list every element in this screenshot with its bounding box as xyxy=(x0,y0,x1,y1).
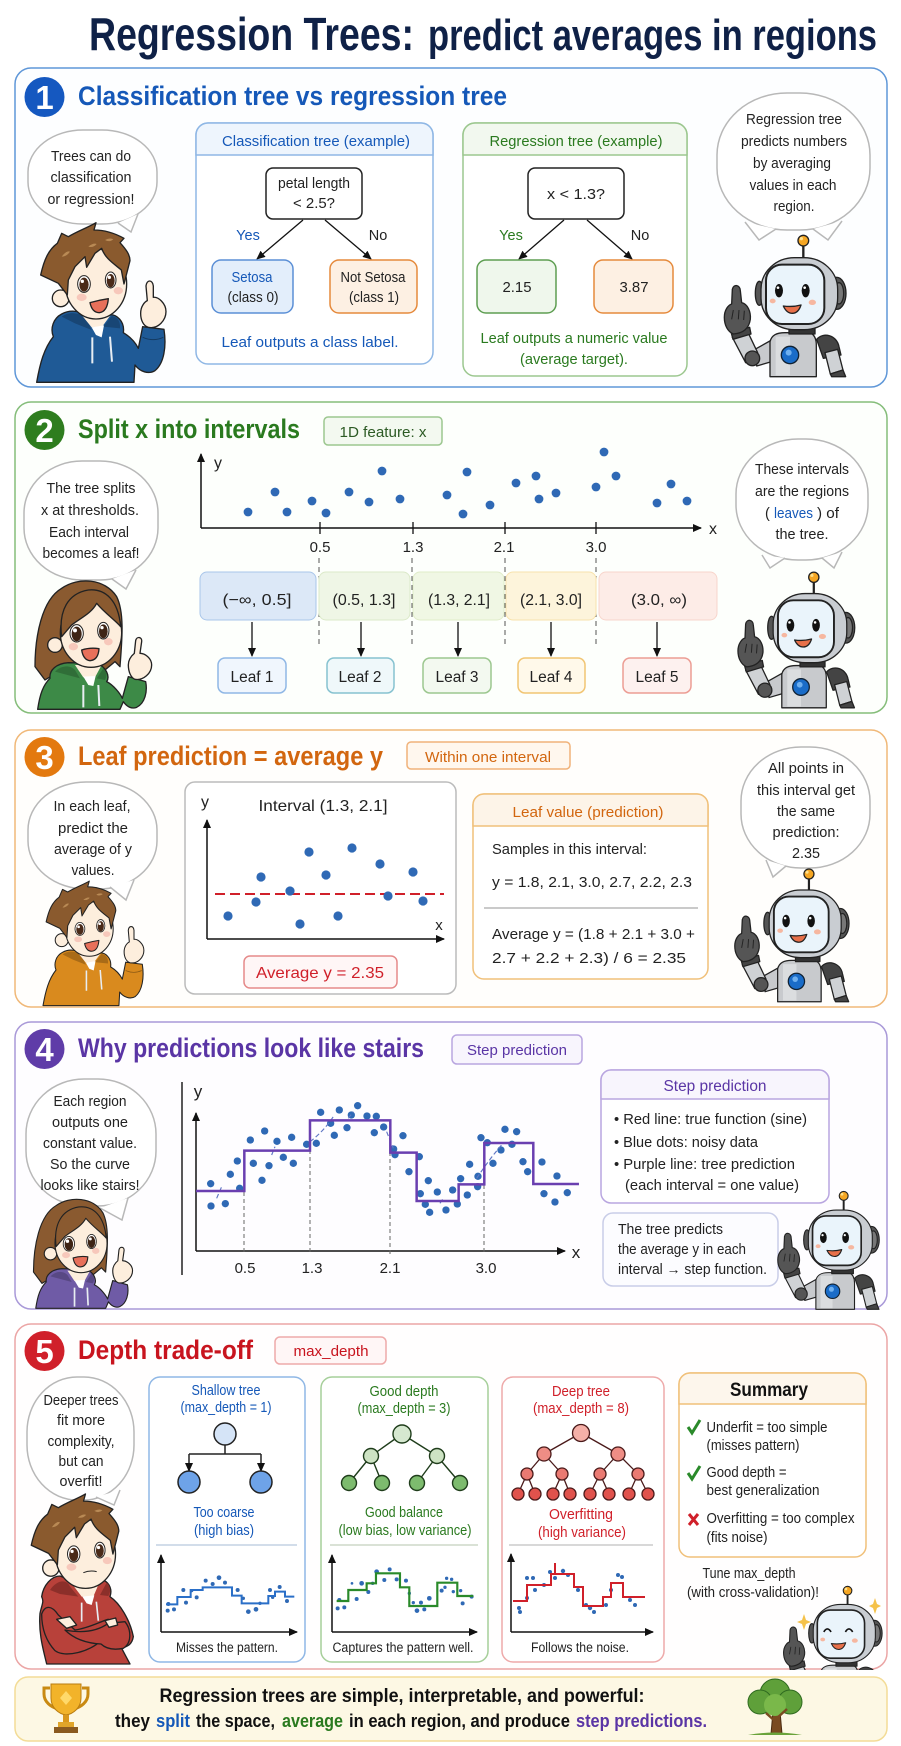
speech bubble: deeper trees: Deeper trees xyxy=(44,1393,118,1409)
heading 3: Leaf prediction = average y xyxy=(78,741,383,771)
scatter chart with thresholds: 2.1 xyxy=(494,539,514,556)
card: good depth xyxy=(321,1377,488,1662)
leaf boxes: Leaf 2 xyxy=(338,669,382,686)
scatter chart with thresholds: 1.3 xyxy=(403,539,423,556)
speech bubble: intervals are the regions: ( xyxy=(765,506,770,522)
decision node: < 2.5? xyxy=(293,196,335,212)
callout: tune max_depth: Tune max_depth xyxy=(702,1566,796,1582)
speech bubble: regression tree predicts numbers: predicts numbers xyxy=(741,134,847,150)
leaf not setosa: Not Setosa xyxy=(340,270,406,286)
character: robot xyxy=(778,1191,879,1309)
badge 5: 5 xyxy=(35,1333,54,1370)
card: shallow tree: (high bias) xyxy=(194,1523,254,1539)
panel: regression tree example: (average target). xyxy=(520,352,628,368)
chart card: interval scatter with mean: x xyxy=(435,917,443,934)
card: deep tree: (max_depth = 8) xyxy=(533,1401,629,1417)
panel: leaf value prediction: 2.7 + 2.2 + 2.3) / 6 = 2.35 xyxy=(492,951,686,967)
speech bubble: deeper trees: overfit! xyxy=(60,1474,102,1490)
speech bubble: intervals are the regions: the tree. xyxy=(776,527,828,543)
callout average xyxy=(244,956,397,988)
panel: step prediction legend: • Red line: true function (sine) xyxy=(614,1112,807,1128)
leaf boxes: Leaf 3 xyxy=(436,669,478,686)
badge 1: 1 xyxy=(35,79,54,116)
panel: step prediction legend: • Blue dots: noisy data xyxy=(614,1135,759,1151)
chart card: interval scatter with mean xyxy=(185,782,456,994)
card: deep tree: Overfitting xyxy=(549,1507,613,1523)
panel: classification tree example xyxy=(196,123,433,364)
note: tree predicts average: the average y in each xyxy=(618,1242,746,1258)
conclusion second line: in each region, and produce xyxy=(349,1711,570,1731)
panel: step prediction legend: Step prediction xyxy=(664,1078,766,1095)
card: good depth: (max_depth = 3) xyxy=(358,1401,450,1417)
interval bar: (2.1, 3.0] xyxy=(520,592,582,609)
character: girl in purple hoodie xyxy=(33,1199,133,1308)
speech bubble: each leaf: average of y xyxy=(54,842,133,858)
tag step prediction xyxy=(452,1035,582,1064)
tag within one interval: Within one interval xyxy=(425,750,551,766)
panel: summary: Summary xyxy=(730,1380,808,1401)
panel: summary: best generalization xyxy=(706,1483,820,1499)
panel: section 1 classification vs regression xyxy=(15,68,887,387)
speech bubble: all points xyxy=(741,747,870,877)
panel: leaf value prediction: y = 1.8, 2.1, 3.0, 2.7, 2.2, 2.3 xyxy=(492,875,692,891)
card: shallow tree: Misses the pattern. xyxy=(176,1640,278,1655)
interval bar: (3.0, ∞) xyxy=(631,592,687,609)
speech bubble: regression tree predicts numbers: region. xyxy=(774,199,814,215)
tree diagram depth 8 xyxy=(512,1424,654,1500)
step chart: 3.0 xyxy=(476,1260,496,1277)
conclusion second line xyxy=(115,1711,707,1731)
leaf 2.15: 2.15 xyxy=(502,280,532,296)
card: deep tree: Deep tree xyxy=(552,1384,610,1400)
speech bubble: each region: constant value. xyxy=(43,1136,137,1152)
step chart: 1.3 xyxy=(302,1260,322,1277)
panel: classification tree example: Classification tree (example) xyxy=(222,134,410,150)
decision node xyxy=(266,168,362,219)
note: tree predicts average xyxy=(603,1213,778,1286)
step chart: 2.1 xyxy=(380,1260,400,1277)
scatter chart with thresholds xyxy=(201,448,717,645)
interval bar: (−∞, 0.5] xyxy=(222,592,292,609)
speech bubble: each region: outputs one xyxy=(52,1115,128,1131)
conclusion second line: split xyxy=(156,1711,190,1731)
arrows yes no regression: No xyxy=(631,228,649,244)
leaf 2.15 xyxy=(477,260,556,313)
conclusion second line: the space, xyxy=(196,1711,275,1731)
decision node x xyxy=(528,168,624,219)
speech bubble: intervals are the regions: ) of xyxy=(817,506,840,522)
badge 3: 3 xyxy=(35,739,54,776)
note: tree predicts average: interval → step function. xyxy=(618,1262,767,1278)
tag 1D feature xyxy=(324,417,442,445)
character: robot xyxy=(735,869,849,1002)
banner: conclusion: Regression trees are simple, interpretable, and powerful: xyxy=(160,1686,644,1707)
panel: summary: (misses pattern) xyxy=(706,1438,800,1454)
speech bubble: tree splits: x at thresholds. xyxy=(41,503,139,519)
tag max_depth: max_depth xyxy=(294,1344,368,1360)
card: deep tree: Follows the noise. xyxy=(531,1640,629,1655)
scatter chart with thresholds: 3.0 xyxy=(586,539,606,556)
speech bubble: trees can do xyxy=(28,130,157,232)
decision node x: x < 1.3? xyxy=(547,187,605,203)
note: tree predicts average: The tree predicts xyxy=(618,1222,723,1238)
panel: regression tree example: Regression tree (example) xyxy=(490,134,662,150)
speech bubble: intervals are the regions: These intervals xyxy=(755,462,849,478)
panel: leaf value prediction: Samples in this interval: xyxy=(492,842,647,858)
panel: regression tree example xyxy=(463,123,687,376)
card: shallow tree: (max_depth = 1) xyxy=(180,1400,272,1416)
speech bubble: tree splits: becomes a leaf! xyxy=(42,546,140,562)
tag within one interval xyxy=(407,742,570,769)
speech bubble: deeper trees xyxy=(27,1377,134,1505)
arrows yes no: Yes xyxy=(236,228,260,244)
speech bubble: all points: the same xyxy=(777,804,835,820)
heading 4: Why predictions look like stairs xyxy=(78,1033,424,1063)
step chart: y xyxy=(194,1082,203,1101)
speech bubble: trees can do: or regression! xyxy=(48,192,134,208)
speech bubble: all points: 2.35 xyxy=(792,846,820,862)
arrows yes no xyxy=(236,220,387,259)
tree diagram depth 1 xyxy=(178,1423,272,1493)
badge 2: 2 xyxy=(35,412,54,449)
interval bar: (0.5, 1.3] xyxy=(332,592,396,609)
icon: tree xyxy=(748,1679,802,1735)
speech bubble: regression tree predicts numbers: by averaging xyxy=(753,156,831,172)
speech bubble: each region: Each region xyxy=(54,1094,126,1110)
panel: section 2 split x into intervals xyxy=(15,402,887,713)
speech bubble: deeper trees: but can xyxy=(58,1454,104,1470)
mini chart good depth xyxy=(332,1555,477,1632)
conclusion second line: step predictions. xyxy=(576,1711,707,1731)
icon: trophy xyxy=(44,1684,88,1733)
speech bubble: regression tree predicts numbers xyxy=(717,93,870,240)
icon: check good depth xyxy=(688,1466,700,1479)
speech bubble: each region: So the curve xyxy=(50,1157,130,1173)
mini chart shallow xyxy=(161,1555,297,1632)
mini chart deep xyxy=(511,1554,653,1632)
leaf 3.87: 3.87 xyxy=(620,280,648,296)
callout: tune max_depth xyxy=(687,1566,819,1601)
speech bubble: deeper trees: complexity, xyxy=(48,1434,114,1450)
leaf boxes: Leaf 1 xyxy=(230,669,274,686)
character: happy robot with sparkles xyxy=(783,1586,883,1670)
arrows to leaves xyxy=(252,622,657,656)
speech bubble: intervals are the regions xyxy=(736,439,868,568)
panel: summary xyxy=(679,1373,866,1557)
step chart xyxy=(182,1082,581,1277)
badge 1 xyxy=(24,77,64,117)
leaf boxes: Leaf 5 xyxy=(636,669,678,686)
tree diagram depth 3 xyxy=(342,1425,468,1490)
leaf setosa xyxy=(212,260,293,313)
leaf setosa: Setosa xyxy=(232,270,273,286)
step chart: x xyxy=(572,1243,581,1262)
panel: step prediction legend: • Purple line: tree prediction xyxy=(614,1157,795,1173)
panel: summary: (fits noise) xyxy=(706,1530,768,1546)
panel: summary: Underfit = too simple xyxy=(706,1420,828,1436)
card: shallow tree xyxy=(149,1377,305,1662)
scatter chart with thresholds: 0.5 xyxy=(310,539,330,556)
step chart: 0.5 xyxy=(235,1260,255,1277)
speech bubble: tree splits: The tree splits xyxy=(46,481,136,497)
banner: conclusion xyxy=(15,1677,887,1741)
panel: leaf value prediction xyxy=(473,794,708,979)
speech bubble: intervals are the regions: leaves xyxy=(774,506,813,522)
speech bubble: deeper trees: fit more xyxy=(57,1413,105,1429)
icon: cross overfitting xyxy=(689,1514,698,1525)
speech bubble: each region: looks like stairs! xyxy=(40,1178,140,1194)
tag 1D feature: 1D feature: x xyxy=(340,425,427,441)
panel: regression tree example: Leaf outputs a numeric value xyxy=(480,331,668,347)
tag max_depth xyxy=(275,1337,386,1364)
panel: classification tree example: Leaf outputs a class label. xyxy=(222,335,398,351)
panel: section 3 leaf prediction xyxy=(15,730,887,1007)
card: good depth: Good balance xyxy=(365,1505,443,1521)
card: good depth: (low bias, low variance) xyxy=(338,1523,472,1539)
speech bubble: each leaf: In each leaf, xyxy=(54,799,130,815)
card: shallow tree: Shallow tree xyxy=(192,1383,260,1399)
speech bubble: each leaf: predict the xyxy=(58,821,128,837)
leaf setosa: (class 0) xyxy=(228,290,278,306)
card: good depth: Good depth xyxy=(370,1384,438,1400)
panel: step prediction legend xyxy=(601,1070,829,1203)
speech bubble: trees can do: Trees can do xyxy=(51,149,131,165)
card: good depth: Captures the pattern well. xyxy=(332,1640,474,1655)
badge 3 xyxy=(24,737,64,777)
interval bar xyxy=(200,572,717,620)
badge 5 xyxy=(24,1331,64,1371)
speech bubble: regression tree predicts numbers: Regression tree xyxy=(746,112,842,128)
speech bubble: each leaf xyxy=(28,782,157,900)
heading 2: Split x into intervals xyxy=(78,414,300,444)
conclusion second line: they xyxy=(115,1711,150,1731)
interval bar: (1.3, 2.1] xyxy=(428,592,490,609)
character: thinking boy with crossed arms xyxy=(31,1494,133,1664)
chart card: interval scatter with mean: Interval (1.3, 2.1] xyxy=(258,798,388,815)
character: boy in blue hoodie xyxy=(37,223,166,382)
title: Regression Trees: xyxy=(89,8,414,60)
panel: leaf value prediction: Average y = (1.8 + 2.1 + 3.0 + xyxy=(492,927,695,943)
badge 2 xyxy=(24,410,64,450)
panel: summary: Overfitting = too complex xyxy=(706,1511,855,1527)
character: boy in orange hoodie xyxy=(43,881,144,1006)
card: deep tree xyxy=(502,1377,664,1662)
speech bubble: regression tree predicts numbers: values in each xyxy=(750,178,836,194)
chart card: interval scatter with mean: y xyxy=(201,794,209,811)
arrows yes no regression xyxy=(499,220,649,259)
callout average: Average y = 2.35 xyxy=(256,965,384,982)
speech bubble: tree splits xyxy=(24,461,158,589)
speech bubble: trees can do: classification xyxy=(50,170,132,186)
callout: tune max_depth: (with cross-validation)! xyxy=(687,1585,819,1601)
scatter chart with thresholds: x xyxy=(709,521,717,538)
speech bubble: all points: All points in xyxy=(768,761,844,777)
panel: section 5 depth trade-off xyxy=(15,1324,887,1701)
character: robot xyxy=(738,572,855,708)
tag step prediction: Step prediction xyxy=(467,1043,567,1059)
decision node: petal length xyxy=(278,176,350,192)
leaf not setosa: (class 1) xyxy=(349,290,399,306)
arrows yes no regression: Yes xyxy=(499,228,523,244)
speech bubble: all points: this interval get xyxy=(757,783,855,799)
speech bubble: each leaf: values. xyxy=(72,863,114,879)
panel: leaf value prediction: Leaf value (prediction) xyxy=(512,805,664,821)
badge 4: 4 xyxy=(35,1031,54,1068)
panel: step prediction legend: (each interval = one value) xyxy=(625,1178,799,1194)
heading 1: Classification tree vs regression tree xyxy=(78,81,507,111)
leaf not setosa xyxy=(330,260,417,313)
leaf 3.87 xyxy=(594,260,673,313)
arrows yes no: No xyxy=(369,228,387,244)
card: shallow tree: Too coarse xyxy=(194,1505,254,1521)
leaf boxes: Leaf 4 xyxy=(530,669,573,686)
character: girl in green hoodie xyxy=(35,581,152,709)
heading 5: Depth trade-off xyxy=(78,1335,254,1365)
speech bubble: all points: prediction: xyxy=(772,825,840,841)
icon: check underfit xyxy=(688,1420,700,1433)
speech bubble: tree splits: Each interval xyxy=(49,525,129,541)
panel: section 4 stairs xyxy=(15,1022,887,1309)
scatter chart with thresholds: y xyxy=(214,455,222,472)
leaf boxes xyxy=(218,658,691,693)
character: robot xyxy=(724,235,846,377)
title xyxy=(89,8,877,60)
panel: summary: Good depth = xyxy=(706,1465,786,1481)
card: deep tree: (high variance) xyxy=(538,1525,626,1541)
speech bubble: intervals are the regions: are the regions xyxy=(755,484,849,500)
badge 4 xyxy=(24,1029,64,1069)
conclusion second line: average xyxy=(282,1711,343,1731)
speech bubble: each region xyxy=(26,1079,156,1220)
